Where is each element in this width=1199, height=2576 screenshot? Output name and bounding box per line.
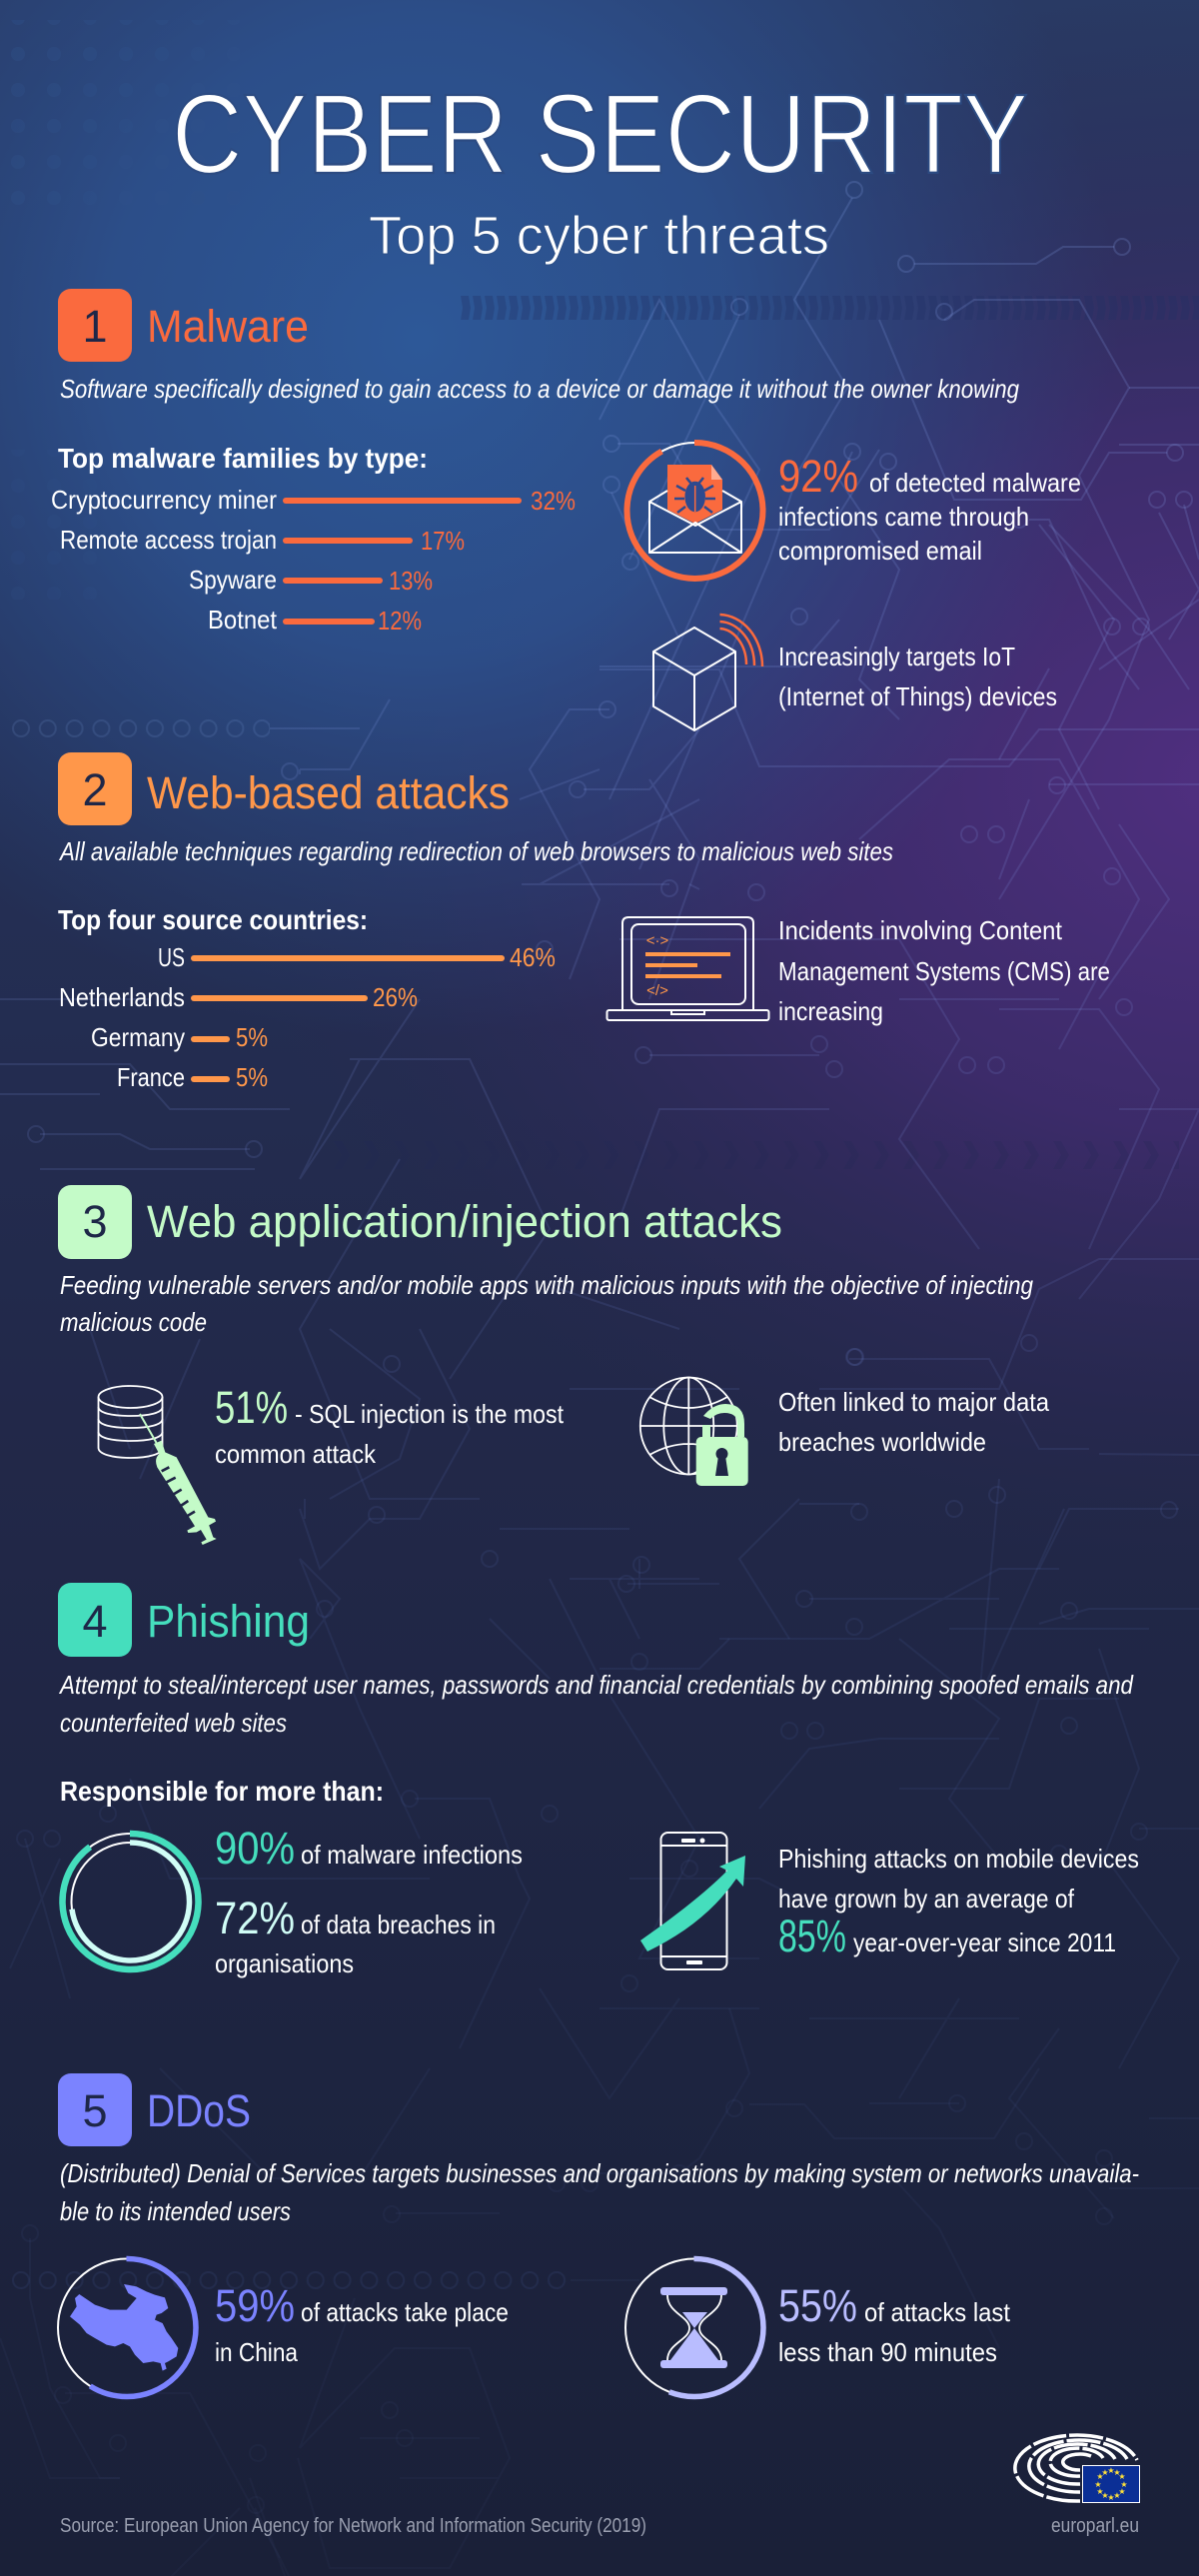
bar chart: malware families: Remote access trojan bbox=[60, 525, 277, 555]
subheading: responsible for more than: Responsible for more than: bbox=[60, 1776, 384, 1807]
bar chart: source countries: US bbox=[158, 942, 185, 972]
bar chart: malware families: 13% bbox=[389, 566, 433, 596]
bar chart: source countries: 5% bbox=[236, 1062, 268, 1092]
bar chart: malware families bbox=[51, 485, 576, 636]
logo: European Parliament: ★ bbox=[1113, 2491, 1121, 2500]
bar chart: source countries: Netherlands bbox=[59, 982, 185, 1012]
icon: smartphone with rising arrow bbox=[640, 1833, 745, 1969]
text: mobile phishing 85%: 85% bbox=[778, 1911, 846, 1961]
logo: European Parliament: ★ bbox=[1120, 2480, 1128, 2489]
stat: 55% duration: 55% bbox=[778, 2280, 857, 2331]
website: europarl.eu: europarl.eu bbox=[1051, 2515, 1139, 2537]
icon: laptop with code: <·> bbox=[646, 932, 668, 949]
icon: China map in 59% ring bbox=[58, 2258, 196, 2396]
stat: 90% and 72%: of malware infections bbox=[301, 1840, 523, 1870]
section 3: web application/injection attacks bbox=[58, 1185, 1049, 1545]
bar chart: malware families: Cryptocurrency miner bbox=[51, 485, 277, 515]
heading: Web application/injection attacks: Web application/injection attacks bbox=[147, 1196, 782, 1247]
text: CMS incidents bbox=[778, 915, 1110, 1026]
description: phishing bbox=[58, 1670, 1134, 1738]
section 1: malware bbox=[51, 289, 1081, 730]
icon: email with bug in 92% ring bbox=[627, 443, 763, 579]
number badge 1: 1 bbox=[82, 301, 108, 352]
logo: European Parliament: ★ bbox=[1101, 2468, 1109, 2477]
stat: 90% and 72%: of data breaches in bbox=[301, 1910, 496, 1939]
icon: IoT cube with signal bbox=[653, 615, 762, 730]
stat: 92% email bbox=[778, 451, 1081, 566]
text: CMS incidents: Management Systems (CMS) are bbox=[778, 956, 1110, 986]
bar chart: source countries: France bbox=[117, 1062, 185, 1092]
stat: 59% China: 59% bbox=[215, 2280, 295, 2331]
stat: 92% email: infections came through bbox=[778, 502, 1029, 532]
logo: European Parliament: ★ bbox=[1096, 2472, 1104, 2481]
bar chart: source countries: 26% bbox=[373, 982, 418, 1012]
description: web-based attacks: All available techniques regarding redirection of web browsers to malicious web sites bbox=[58, 836, 893, 866]
stat: 51% SQL injection bbox=[215, 1382, 565, 1469]
icon: hourglass in 55% ring bbox=[625, 2258, 763, 2396]
logo: European Parliament: ★ bbox=[1096, 2487, 1104, 2496]
bar chart: malware families: 17% bbox=[421, 526, 465, 556]
stat: 92% email: of detected malware bbox=[869, 468, 1081, 498]
stat: 90% and 72% bbox=[215, 1823, 523, 1978]
logo: European Parliament: ★ bbox=[1118, 2472, 1126, 2481]
text: IoT: (Internet of Things) devices bbox=[778, 681, 1057, 711]
stat: 92% email: 92% bbox=[778, 451, 858, 502]
text: mobile phishing 85%: year-over-year since 2011 bbox=[853, 1928, 1116, 1957]
text: data breaches: breaches worldwide bbox=[778, 1427, 986, 1457]
text: IoT: Increasingly targets IoT bbox=[778, 642, 1015, 671]
stat: 51% SQL injection: common attack bbox=[215, 1439, 377, 1469]
number badge 3 bbox=[58, 1185, 132, 1259]
bar chart: malware families: Spyware bbox=[189, 565, 277, 595]
logo: European Parliament: ★ bbox=[1101, 2491, 1109, 2500]
text: mobile phishing 85%: have grown by an average of bbox=[778, 1884, 1075, 1914]
icon: globe with open padlock bbox=[640, 1377, 748, 1486]
logo: European Parliament: ★ bbox=[1113, 2468, 1121, 2477]
description: injection attacks: Feeding vulnerable servers and/or mobile apps with malicious inputs with the objective of injecting bbox=[60, 1270, 1033, 1300]
stat: 59% China: in China bbox=[215, 2337, 298, 2367]
heading: DDoS: DDoS bbox=[147, 2085, 251, 2136]
icon: laptop with code: </> bbox=[646, 982, 668, 999]
number badge 4: 4 bbox=[82, 1596, 108, 1647]
logo: European Parliament bbox=[1015, 2435, 1139, 2502]
stat: 92% email: compromised email bbox=[778, 536, 982, 566]
description: Malware: Software specifically designed to gain access to a device or damage it without the owner knowing bbox=[60, 374, 1019, 404]
stat: 51% SQL injection: 51% bbox=[215, 1382, 288, 1433]
bar chart: malware families: Botnet bbox=[208, 605, 278, 635]
text: data breaches bbox=[778, 1387, 1049, 1457]
logo: European Parliament: ★ bbox=[1107, 2493, 1115, 2502]
heading: Phishing: Phishing bbox=[147, 1596, 310, 1647]
stat: 55% duration: less than 90 minutes bbox=[778, 2337, 997, 2367]
stat: 90% and 72%: organisations bbox=[215, 1948, 354, 1978]
stat: 90% and 72%: 90% bbox=[215, 1823, 295, 1874]
number badge 3: 3 bbox=[82, 1196, 108, 1247]
text: mobile phishing 85%: Phishing attacks on mobile devices bbox=[778, 1844, 1139, 1874]
subheading: source countries: Top four source countries: bbox=[58, 904, 368, 935]
section 4: phishing bbox=[58, 1583, 1139, 1978]
number badge 4 bbox=[58, 1583, 132, 1657]
stat: 55% duration bbox=[778, 2280, 1011, 2367]
logo: European Parliament: ★ bbox=[1118, 2487, 1126, 2496]
number badge 2 bbox=[58, 752, 132, 825]
stat: 51% SQL injection: - SQL injection is the most bbox=[295, 1399, 565, 1429]
subheading: malware families: Top malware families by type: bbox=[58, 443, 428, 474]
section 5: DDoS bbox=[58, 2073, 1139, 2396]
heading: Malware: Malware bbox=[147, 301, 309, 352]
number badge 1 bbox=[58, 289, 132, 362]
bar chart: source countries: 5% bbox=[236, 1022, 268, 1052]
icon: database with syringe bbox=[98, 1386, 217, 1545]
stat: 55% duration: of attacks last bbox=[864, 2297, 1011, 2327]
title: CYBER SECURITY bbox=[172, 71, 1028, 197]
number badge 2: 2 bbox=[82, 764, 108, 815]
logo: European Parliament: ★ bbox=[1107, 2466, 1115, 2475]
source note: Source: European Union Agency for Network and Information Security (2019) bbox=[60, 2515, 646, 2537]
description: DDoS bbox=[60, 2158, 1139, 2226]
text: CMS incidents: increasing bbox=[778, 996, 883, 1026]
text: CMS incidents: Incidents involving Content bbox=[778, 915, 1063, 945]
number badge 5 bbox=[58, 2073, 132, 2146]
subtitle: Top 5 cyber threats bbox=[369, 206, 829, 266]
stat: 59% China bbox=[215, 2280, 509, 2367]
section 2: web-based attacks bbox=[58, 752, 1110, 1092]
description: phishing: counterfeited web sites bbox=[60, 1708, 287, 1738]
icon: laptop with code bbox=[607, 917, 769, 1020]
bar chart: source countries bbox=[59, 942, 556, 1092]
text: data breaches: Often linked to major data bbox=[778, 1387, 1049, 1417]
bar chart: source countries: 46% bbox=[510, 942, 556, 972]
logo: European Parliament: ★ bbox=[1094, 2480, 1102, 2489]
description: DDoS: ble to its intended users bbox=[60, 2196, 291, 2226]
number badge 5: 5 bbox=[82, 2085, 108, 2136]
description: injection attacks bbox=[60, 1270, 1033, 1337]
description: injection attacks: malicious code bbox=[60, 1307, 207, 1337]
stat: 59% China: of attacks take place bbox=[301, 2297, 509, 2327]
stat: 90% and 72%: 72% bbox=[215, 1893, 295, 1943]
text: IoT bbox=[778, 642, 1057, 711]
bar chart: malware families: 12% bbox=[378, 606, 422, 636]
text: mobile phishing 85% bbox=[778, 1844, 1139, 1961]
heading: Web-based attacks: Web-based attacks bbox=[147, 767, 510, 818]
bar chart: source countries: Germany bbox=[91, 1022, 185, 1052]
chart: 90% and 72% rings bbox=[62, 1834, 198, 1969]
bar chart: malware families: 32% bbox=[531, 486, 576, 516]
